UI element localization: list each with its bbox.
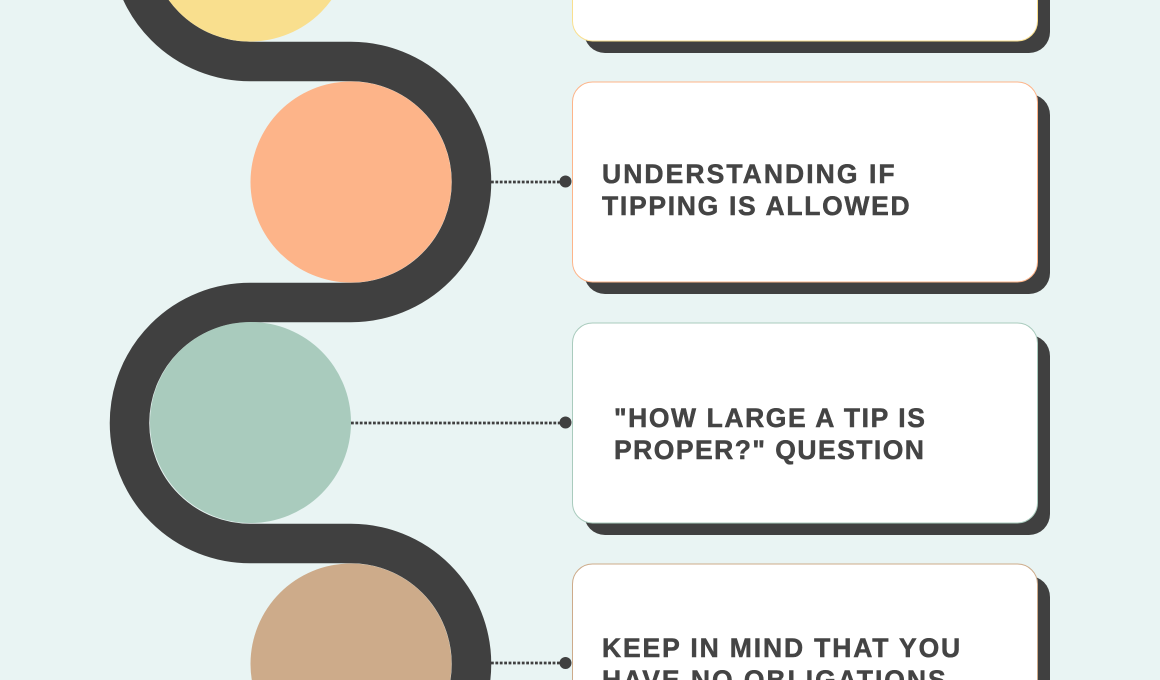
card 3: how large a tip is proper question [572, 323, 1050, 535]
card 2 text: UNDERSTANDING IF [602, 159, 897, 189]
card 1: top, cropped [572, 0, 1050, 53]
circle: peach [250, 82, 452, 282]
circle: green [150, 322, 351, 523]
connector: tan to card 4 [491, 657, 572, 669]
card 4 text: KEEP IN MIND THAT YOU [602, 633, 962, 663]
card 3 text: PROPER?" QUESTION [614, 435, 925, 465]
card 2: understanding if tipping is allowed [572, 82, 1050, 294]
card 3 text: "HOW LARGE A TIP IS [614, 403, 927, 433]
card 4: keep in mind, cropped [572, 564, 1050, 680]
connector: peach to card 2 [491, 176, 572, 188]
card 2 text: TIPPING IS ALLOWED [602, 191, 911, 221]
circle: tan [250, 564, 452, 680]
circle: yellow [150, 0, 350, 42]
winding path [130, 0, 472, 680]
connector: green to card 3 [351, 416, 572, 428]
